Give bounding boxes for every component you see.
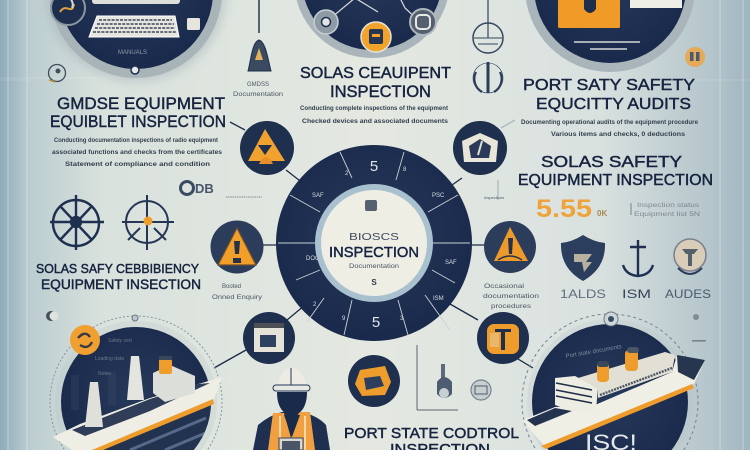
heading: ring centre: S xyxy=(371,278,377,287)
panel: bottom-right ship circle xyxy=(522,312,705,450)
heading: ring centre: INSPECTION xyxy=(329,244,419,261)
small chart text on ship panel: Notes xyxy=(98,371,112,377)
text block: stat note: Inspection status xyxy=(637,203,699,209)
ring tick labels: ISM xyxy=(433,296,444,302)
labels: logo row xyxy=(560,287,711,301)
labels: logo row: AUDES xyxy=(665,287,711,301)
small chart text on ship panel xyxy=(95,338,133,377)
icon: warning circle right xyxy=(484,221,536,273)
labels: logo row: 1ALDS xyxy=(560,287,606,301)
icon: hanging bell xyxy=(248,0,271,71)
icon: pin badge xyxy=(604,312,618,326)
caption: right of ring lower: Occasional xyxy=(484,284,524,290)
icon: document circle lower left xyxy=(243,312,295,364)
heading: ring centre: Documentation xyxy=(349,264,399,270)
ring tick labels: SAF xyxy=(445,260,457,266)
icon: left dial xyxy=(314,10,338,34)
heading: GMDSE equipment xyxy=(50,94,226,131)
icon: orange badge xyxy=(70,325,100,355)
heading: port safety audits: EQUCITTY AUDITS xyxy=(536,96,691,113)
heading: port state control xyxy=(344,425,519,450)
panel: top-center equipment circle xyxy=(294,0,450,58)
caption: right of ring lower: documentation xyxy=(483,294,539,300)
heading: port state control: PORT STATE CODTROL xyxy=(344,425,519,442)
small icon: tools xyxy=(365,200,377,211)
text block: GMDSE description: associated functions and checks from the certificates xyxy=(52,149,222,156)
ring tick labels: SAF xyxy=(312,193,324,199)
number: top 5: 5 xyxy=(370,158,378,175)
text block: port safety description xyxy=(521,119,698,138)
text block: SOLAS description xyxy=(300,105,449,125)
icon: badge circle bottom center xyxy=(348,355,400,407)
icon: right dial xyxy=(410,9,436,35)
icon: hanging compass xyxy=(473,0,503,53)
icon: shield badge circle upper right xyxy=(453,121,507,175)
icon: small gear cluster lower center xyxy=(417,345,491,410)
icon: monitor base xyxy=(92,0,180,4)
ring tick labels: 2 xyxy=(345,171,349,177)
icon: ODB mini mark: DB xyxy=(195,181,214,196)
icon: small headset left xyxy=(48,64,66,82)
heading: SOLAS equipment xyxy=(300,65,452,101)
heading: SOLAS equipment: INSPECTION xyxy=(330,82,431,101)
icon: warning circle left xyxy=(210,220,264,274)
chart: central inspection ring xyxy=(276,145,472,341)
ring tick labels: 2 xyxy=(313,302,317,308)
icon: shield logo xyxy=(561,235,605,281)
text block: port safety description: Various items and checks, 0 deductions xyxy=(551,131,685,138)
panel: top-left computer console circle xyxy=(46,0,226,82)
caption: right of ring: Inspections xyxy=(484,195,504,200)
heading: GMDSE equipment: EQUIBLET INSPECTION xyxy=(50,112,226,131)
caption: left lower: Onned Enquiry xyxy=(212,295,262,301)
heading: SOLAS safety equipment inspection xyxy=(518,154,713,189)
icon: compass anchor xyxy=(473,62,503,93)
heading: SOLAS safety certificate: EQUIPMENT INSECTION xyxy=(41,277,201,292)
ring tick labels: 9 xyxy=(342,316,346,322)
stat: 5.55 xyxy=(536,195,607,223)
icon: keyboard xyxy=(89,16,179,37)
icon: target wheel xyxy=(122,195,174,250)
heading: GMDSE equipment: GMDSE EQUIPMENT xyxy=(57,94,225,113)
connectors xyxy=(214,120,533,368)
caption: right of ring lower: procedures xyxy=(491,304,531,310)
icon: orange small badge xyxy=(685,47,705,67)
caption: right of ring xyxy=(484,180,504,200)
caption: bell xyxy=(233,82,283,98)
ring tick labels: DOC xyxy=(306,256,320,262)
panel: bottom-left ship circle xyxy=(50,315,240,450)
text block: port safety description: Documenting operational audits of the equipment procedure xyxy=(521,119,698,126)
icon: anchor logo xyxy=(623,240,653,276)
heading: SOLAS safety certificate xyxy=(36,262,201,292)
labels: logo row: ISM xyxy=(622,287,651,301)
icon: orange dial xyxy=(361,22,391,52)
heading: SOLAS equipment: SOLAS CEAUIPENT xyxy=(300,65,452,82)
icon: hook circle lower right xyxy=(477,312,529,364)
panel: top-right audit circle xyxy=(525,0,695,72)
heading: ring centre xyxy=(329,232,419,287)
text block: SOLAS description: Checked devices and associated documents xyxy=(302,118,448,125)
caption: left lower xyxy=(212,284,262,301)
icon: right ship xyxy=(523,347,705,449)
heading: ring centre: BIOSCS xyxy=(349,232,399,243)
heading: SOLAS safety equipment inspection: EQUIPMENT INSPECTION xyxy=(518,172,713,189)
text block: stat note: Equipment list 5N xyxy=(634,212,700,218)
icon: right edge marks xyxy=(692,314,706,342)
icon: ODB mini mark xyxy=(180,181,262,197)
caption: right of ring lower xyxy=(483,284,539,310)
icon: small crescent mark xyxy=(46,311,58,321)
caption: left lower: Booted xyxy=(222,284,241,290)
ring tick labels: 8 xyxy=(403,167,407,173)
icon: round badge logo xyxy=(674,239,706,274)
text block: GMDSE description: Statement of compliance and condition xyxy=(65,161,210,168)
text block: stat note xyxy=(631,203,700,218)
number: bottom 5: 5 xyxy=(372,314,380,331)
panel: top-left computer console circle: MANUALS xyxy=(118,50,147,56)
text block: SOLAS description: Conducting complete inspections of the equipment xyxy=(300,105,449,112)
icon: gauge badge xyxy=(51,0,85,25)
icon: warning triangle circle upper left xyxy=(240,121,294,175)
icon: ship wheel xyxy=(50,195,104,250)
heading: port safety audits xyxy=(523,77,695,113)
small chart text on ship panel: Loading data xyxy=(95,356,124,362)
caption: bell: GMDSS xyxy=(247,82,269,88)
heading: port safety audits: PORT SATY SAFETY xyxy=(523,77,695,94)
stat: 5.55: 0K xyxy=(597,209,607,218)
icon: left ship xyxy=(53,356,240,450)
ring tick labels xyxy=(306,167,457,322)
heading: SOLAS safety equipment inspection: SOLAS SAFETY xyxy=(541,154,682,171)
small chart text on ship panel: Safety cert xyxy=(108,338,133,344)
icon: orange padlock card xyxy=(558,0,620,28)
icon: inspector worker xyxy=(253,368,330,450)
panel: bottom-right ship circle: Port state documents xyxy=(565,344,622,360)
heading: SOLAS safety certificate: SOLAS SAFY CEBBIBIENCY xyxy=(36,262,200,276)
ring tick labels: PSC xyxy=(432,193,445,199)
ring tick labels: 3 xyxy=(400,316,404,322)
text block: GMDSE description: Conducting documentation inspections of radio equipment xyxy=(54,137,219,144)
stat: 5.55: 5.55 xyxy=(536,195,592,223)
text block: GMDSE description xyxy=(52,137,222,168)
caption: bell: Documentation xyxy=(233,92,283,98)
